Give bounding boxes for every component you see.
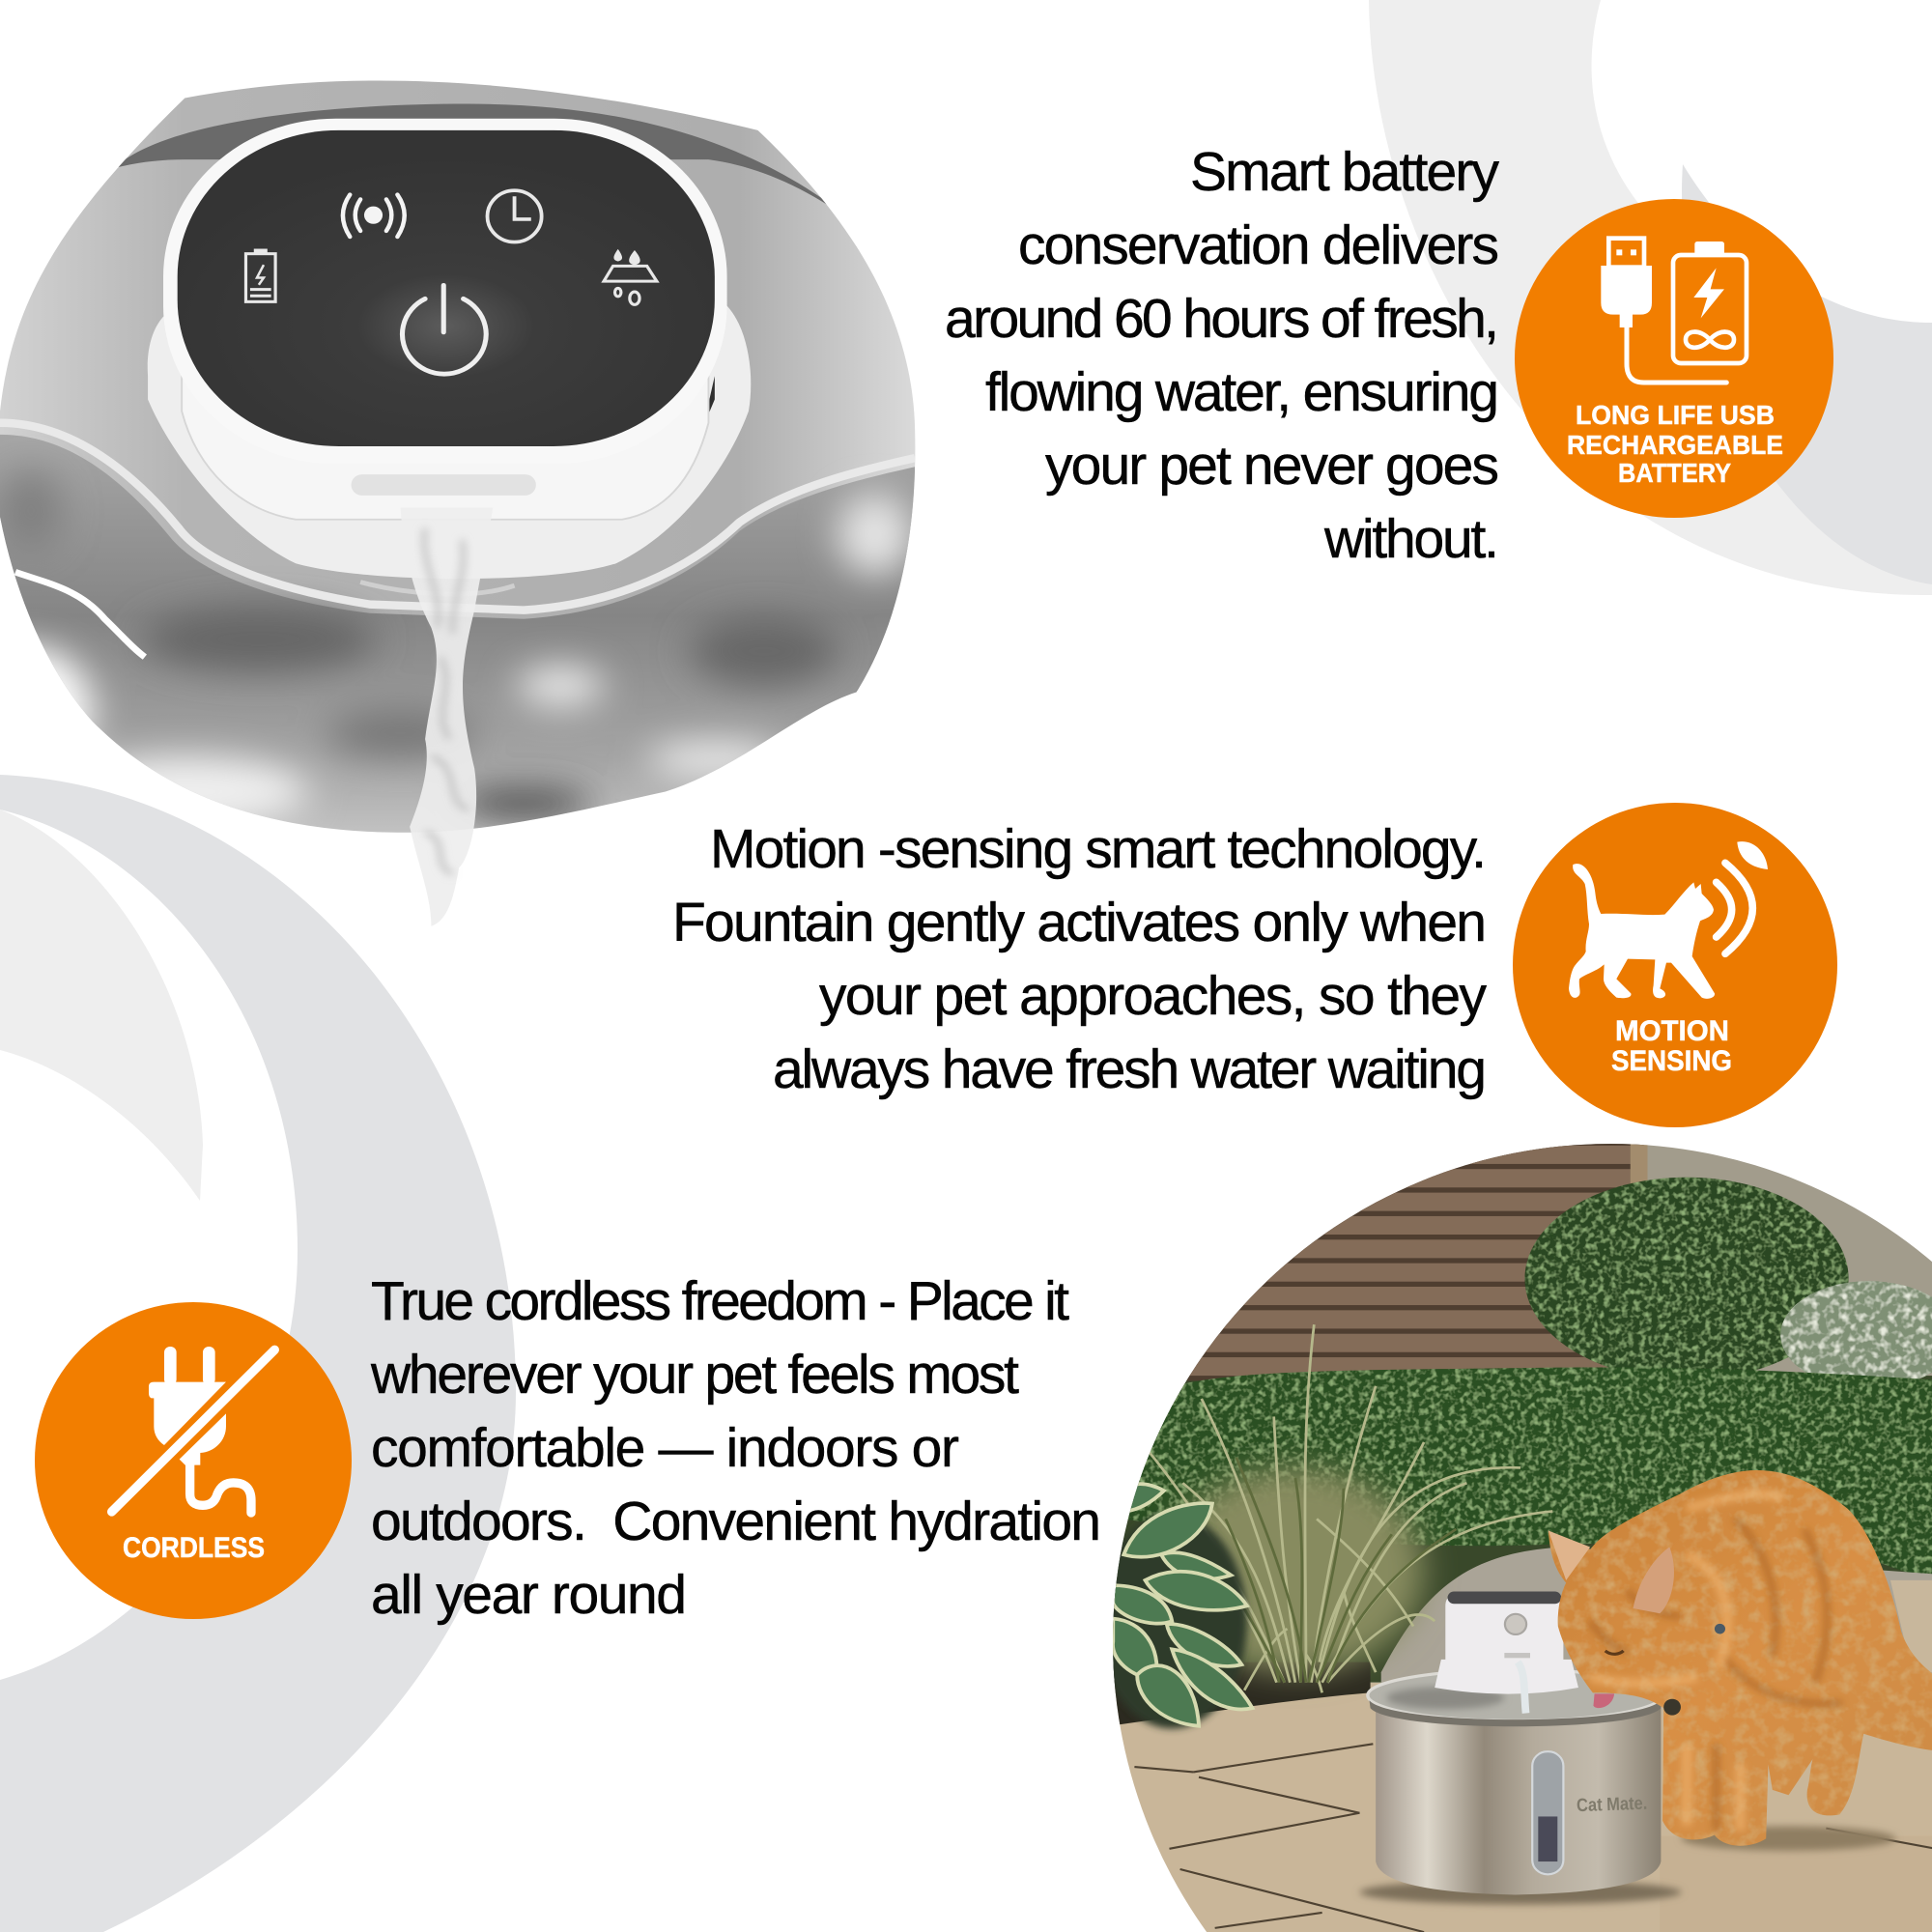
- text block: cordless: all year round: [371, 1564, 687, 1626]
- badge: cordless: [35, 1302, 352, 1619]
- text block: cordless: True cordless freedom - Place it: [371, 1270, 1069, 1332]
- ornamental grass: [1146, 1324, 1552, 1692]
- water stream: [401, 508, 493, 926]
- text block: motion sensing: Fountain gently activates only when: [672, 892, 1487, 953]
- text block: motion sensing: your pet approaches, so they: [819, 965, 1488, 1027]
- clipped hedge: [1123, 1367, 1932, 1580]
- icon: battery: [245, 251, 275, 301]
- badge label: LONG LIFE USB: [1576, 400, 1775, 430]
- text block: cordless: wherever your pet feels most: [370, 1344, 1019, 1406]
- text block: battery: Smart battery: [1190, 141, 1499, 203]
- text block: battery: your pet never goes: [1045, 435, 1499, 497]
- text block: battery: conservation delivers: [1018, 214, 1499, 276]
- hosta leaves: [1097, 1484, 1252, 1728]
- base planting shade: [1092, 1376, 1932, 1683]
- text block: battery: without.: [1323, 508, 1499, 570]
- icon: filter with drops: [604, 249, 657, 304]
- black control face: [178, 130, 715, 446]
- badge label: MOTION: [1615, 1015, 1729, 1047]
- text block: motion sensing: always have fresh water waiting: [773, 1038, 1487, 1100]
- badge label: SENSING: [1611, 1045, 1732, 1077]
- text block: battery: flowing water, ensuring: [985, 361, 1499, 423]
- steel upper surface: [0, 48, 924, 634]
- steel lower body: [0, 435, 915, 838]
- brand label: Cat Mate.: [1577, 1793, 1648, 1816]
- badge: long life USB rechargeable battery: [1515, 199, 1833, 518]
- outlet slot: [352, 474, 536, 496]
- text block: battery: around 60 hours of fresh,: [945, 288, 1499, 350]
- background swirl: bottom left: [0, 775, 516, 1932]
- text block: motion sensing: Motion -sensing smart technology.: [710, 818, 1487, 880]
- dark rear rim band: [118, 104, 827, 205]
- ginger cat: [1548, 1470, 1932, 1851]
- text block: cordless: comfortable — indoors or: [371, 1417, 959, 1479]
- badge label: BATTERY: [1618, 458, 1731, 488]
- white reflection on steel: [15, 572, 145, 657]
- cat eye, tongue, collar bell: [1605, 1651, 1624, 1654]
- steel water fountain: [1360, 1592, 1681, 1905]
- water level window: [1532, 1751, 1563, 1874]
- icon: cat with sensor waves: [1569, 841, 1768, 999]
- paving cracks: [1134, 1744, 1932, 1932]
- icon: crossed-out plug: [112, 1347, 274, 1513]
- background swirl: top right: [1369, 0, 1932, 595]
- badge: motion sensing: [1513, 803, 1837, 1127]
- paving: [1092, 1683, 1932, 1932]
- white base collar: [148, 306, 751, 579]
- icon: motion sensor: [343, 194, 405, 237]
- icon: clock: [487, 190, 542, 242]
- wooden slat fence: [1146, 1141, 1648, 1380]
- control unit: [148, 119, 751, 594]
- text block: cordless: outdoors. Convenient hydration: [371, 1491, 1101, 1552]
- photo: fountain control panel close-up: [0, 48, 924, 926]
- icon: power button: [402, 285, 486, 374]
- cap top rim: [163, 119, 727, 464]
- water spout: [1518, 1662, 1526, 1714]
- icon: USB cable and battery: [1601, 239, 1747, 383]
- variegated shrub: [1780, 1281, 1932, 1388]
- badge label: CORDLESS: [123, 1532, 265, 1564]
- rim highlight: [0, 423, 915, 611]
- text block: battery: [945, 141, 1499, 570]
- badge label: [1567, 400, 1783, 488]
- cat ears: [1548, 1531, 1590, 1580]
- cap side wall: [182, 282, 708, 520]
- text block: cordless: [370, 1270, 1101, 1626]
- white pump module: [1435, 1593, 1578, 1694]
- text block: motion sensing: [672, 818, 1488, 1100]
- stone wall backdrop: [1157, 1144, 1932, 1436]
- badge label: RECHARGEABLE: [1567, 430, 1783, 460]
- photo: ginger cat drinking from fountain: [1092, 1130, 1932, 1932]
- round topiary bush: [1524, 1178, 1849, 1379]
- badge label: [1611, 1015, 1732, 1077]
